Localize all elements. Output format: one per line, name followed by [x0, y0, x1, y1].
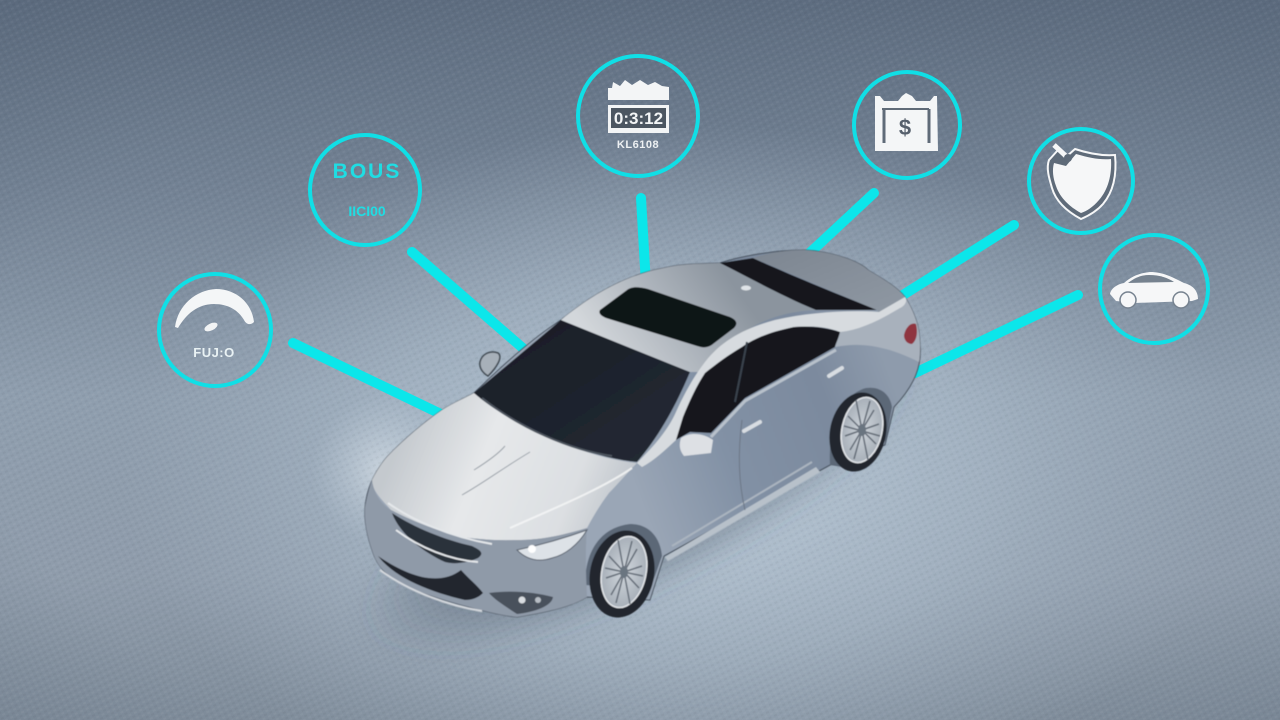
icon: code label [310, 135, 420, 245]
roof [561, 263, 816, 372]
rear arch [830, 388, 892, 470]
rear window [720, 258, 877, 310]
lower lip [380, 570, 482, 611]
car body [365, 250, 920, 617]
grille chrome [388, 503, 492, 562]
front wheel [582, 524, 662, 624]
trunk [753, 250, 905, 312]
antenna [741, 286, 751, 290]
front bumper [365, 480, 587, 617]
windshield [474, 320, 690, 462]
door handles [744, 422, 760, 431]
icon: speedometer gauge [159, 274, 271, 386]
roof pillar highlight [637, 297, 906, 467]
icon: code label: BOUS [333, 160, 401, 183]
left mirror [480, 352, 500, 376]
icon: calendar display [578, 56, 698, 176]
window pillar [735, 342, 747, 402]
tail light [904, 323, 917, 344]
icon: battery: $ [899, 115, 911, 140]
door line [739, 420, 745, 510]
icon: code label: IICI00 [348, 203, 386, 219]
headlight [517, 530, 587, 560]
sill chrome [665, 467, 820, 561]
hood [372, 393, 637, 540]
side windows [676, 327, 840, 440]
lower intake [378, 556, 483, 600]
belt line [711, 350, 836, 437]
icon: calendar display: 0:3:12 [614, 109, 663, 128]
grille [392, 513, 481, 563]
fog lamp [489, 592, 553, 614]
car [318, 250, 962, 720]
icon: battery [854, 72, 960, 178]
icon: calendar display: KL6108 [617, 139, 659, 151]
sunroof [599, 287, 736, 347]
connector lines [293, 193, 1078, 416]
hood creases [462, 446, 530, 495]
right mirror [680, 434, 713, 456]
icon: speedometer gauge: FUJ:O [193, 345, 235, 360]
car shadow [318, 260, 962, 720]
icon: small car [1100, 235, 1208, 343]
rear shoulder [835, 297, 920, 362]
rear wheel [822, 387, 894, 477]
icon: shield [1029, 129, 1133, 233]
